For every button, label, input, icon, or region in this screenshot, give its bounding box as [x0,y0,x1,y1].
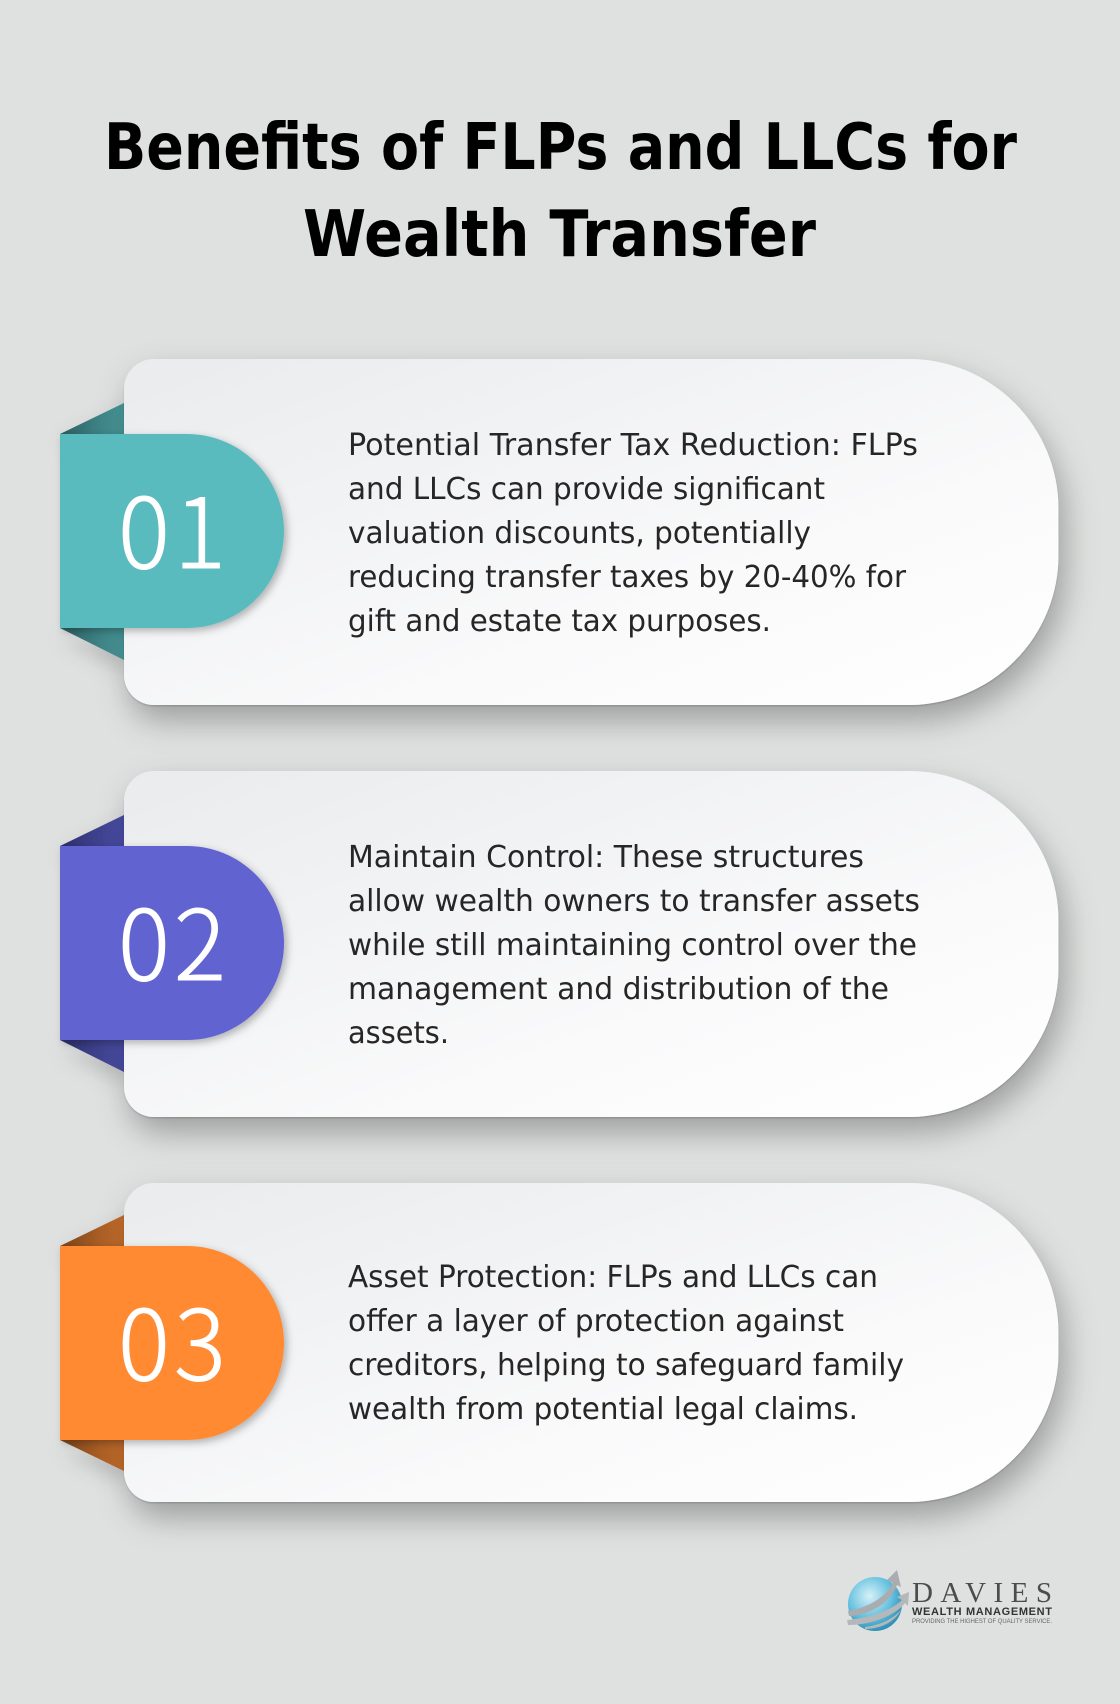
icon: globe with arrows [847,1570,909,1631]
text: benefit 02: Maintain Control: These structures [348,840,864,875]
panel: benefit 03 [60,1183,1059,1502]
card: benefit 03 [124,1183,1059,1502]
badge: 02 [60,846,284,1040]
number: 02: 02 [118,867,226,1008]
panel: benefit 01 [60,359,1059,705]
card: benefit 02 [124,771,1059,1117]
wing folds: benefit 02 [60,814,126,1073]
text: benefit 01: gift and estate tax purposes. [348,604,771,639]
text: benefit 03: wealth from potential legal claims. [348,1392,858,1427]
text: benefit 02: allow wealth owners to transfer assets [348,884,920,919]
logo wordmark [912,1577,1052,1625]
logo wordmark: DAVIES [912,1577,1052,1609]
logo wordmark: WEALTH MANAGEMENT [912,1606,1052,1618]
text: benefit 03: creditors, helping to safeguard family [348,1348,904,1383]
text: benefit 01: Potential Transfer Tax Reduction: FLPs [348,428,918,463]
text: benefit 03: Asset Protection: FLPs and LLCs can [348,1260,878,1295]
title [104,111,1017,272]
title: Wealth Transfer [303,198,816,272]
wing folds: benefit 03 [60,1214,126,1472]
text: benefit 01: valuation discounts, potentially [348,516,811,551]
logo wordmark: PROVIDING THE HIGHEST OF QUALITY SERVICE. [912,1619,1052,1625]
text: benefit 02: while still maintaining control over the [348,928,917,963]
text: benefit 02: assets. [348,1016,449,1051]
text: benefit 02 [348,840,920,1051]
text: benefit 01 [348,428,918,639]
badge: 03 [60,1246,284,1440]
text: benefit 01: reducing transfer taxes by 20-40% for [348,560,907,595]
panel: benefit 02 [60,771,1059,1117]
number: 01: 01 [118,455,226,596]
text: benefit 01: and LLCs can provide significant [348,472,825,507]
logo: Davies Wealth Management [847,1570,1052,1631]
wing folds: benefit 01 [60,402,126,661]
card: benefit 01 [124,359,1059,705]
text: benefit 03 [348,1260,904,1427]
badge: 01 [60,434,284,628]
number: 03: 03 [118,1267,226,1408]
text: benefit 02: management and distribution of the [348,972,889,1007]
text: benefit 03: offer a layer of protection against [348,1304,844,1339]
